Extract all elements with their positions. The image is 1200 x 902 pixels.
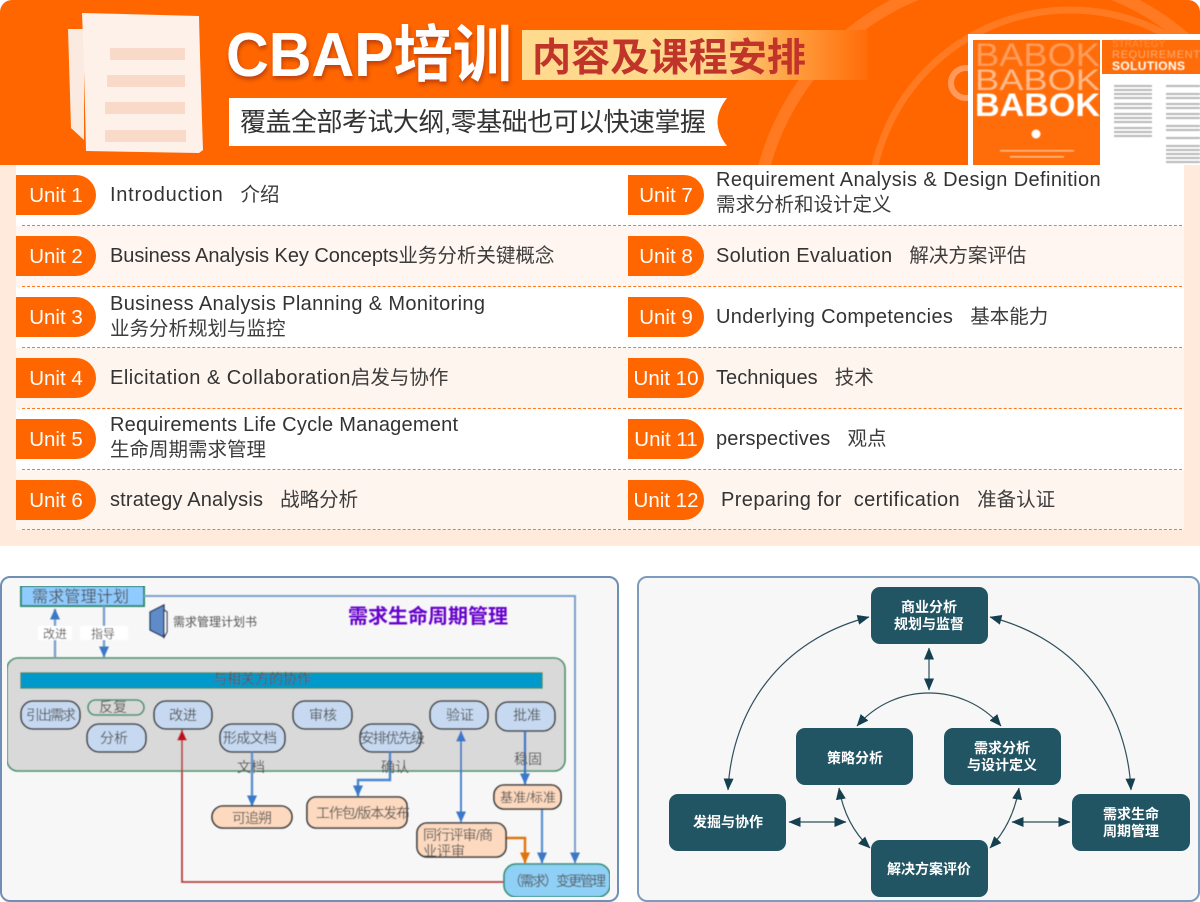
arrow: confirm [358,752,390,796]
unit 3: Unit 3 [29,306,83,329]
unit 7: Unit 7 [639,184,693,207]
arrow: improve up [54,609,56,658]
boxes: 商业分析 [901,599,957,615]
icon: paper document [68,13,203,153]
output nodes: 业评审 [423,843,465,859]
unit 10 text: Techniques 技术 [716,367,874,389]
unit 2: Unit 2 [29,245,83,268]
label: document: 文档 [237,759,265,775]
unit 5 [16,419,96,459]
label: confirm: 确认 [381,759,409,775]
nodes: 引出需求 [26,707,76,723]
unit 3 [16,297,96,337]
image: BABOK book: BABOK [975,64,1100,97]
unit 5: Unit 5 [29,428,83,451]
nodes: 分析 [100,730,128,746]
subtitle strip: 覆盖全部考试大纲,零基础也可以快速掌握 [240,107,706,137]
panel: course list background [0,165,1200,546]
collaboration container [7,658,565,771]
unit 11: Unit 11 [634,428,698,451]
nodes: 审核 [309,707,337,723]
unit 4 text: Elicitation & Collaboration启发与协作 [110,367,448,389]
banner: subtitle highlight: 内容及课程安排 [532,37,806,80]
output nodes: 基准/标准 [500,790,556,805]
unit 1: Unit 1 [29,184,83,207]
output nodes: 同行评审/商 [423,827,493,843]
unit 9 text: Underlying Competencies 基本能力 [716,306,1048,328]
label: stabilize: 稳固 [514,751,542,767]
unit 7 text: 需求分析和设计定义 [716,194,892,216]
unit 9 [628,297,704,337]
label: guide: 指导 [91,626,115,641]
unit 1 [16,175,96,215]
arrow: plan to change management [144,596,575,863]
image: BABOK book: BABOK [975,87,1100,123]
arrow: baseline [541,809,543,863]
arrow: document [251,752,253,806]
unit 4: Unit 4 [29,367,83,390]
output nodes [212,785,610,897]
label: guide [80,626,128,641]
unit 5 text: Requirements Life Cycle Management [110,414,458,436]
arrow: change loop [182,730,504,882]
image: BABOK book: REQUIREMENT [1112,49,1200,61]
unit 6 [16,480,96,520]
cycle arrows [728,617,1131,848]
unit 7 text [716,169,1101,216]
boxes: 需求生命 [1103,806,1159,822]
unit 3 text: 业务分析规划与监控 [110,318,286,340]
boxes [669,587,1190,897]
nodes: 改进 [169,707,197,723]
nodes: 反复 [99,699,127,715]
plan box: 需求管理计划 [32,588,129,606]
unit 4 [16,358,96,398]
boxes: 周期管理 [1103,823,1159,839]
label: improve [38,626,72,641]
image: BABOK book: STRATEGY [1112,39,1165,50]
unit 3 text: Business Analysis Planning & Monitoring [110,293,485,315]
unit 10 [628,358,704,398]
panel: requirements life cycle flow [0,576,619,902]
boxes: 策略分析 [827,750,883,766]
boxes: 解决方案评价 [887,861,971,877]
unit 7 text: Requirement Analysis & Design Definition [716,169,1101,191]
nodes: 形成文档 [223,730,277,746]
label: improve: 改进 [43,627,67,641]
output nodes: 可追朔 [232,810,272,826]
image: BABOK book: SOLUTIONS [1112,59,1185,73]
unit 7 [628,175,704,215]
unit 10: Unit 10 [634,367,698,390]
nodes: 验证 [446,707,474,723]
unit 9: Unit 9 [639,306,693,329]
unit 6: Unit 6 [29,489,83,512]
collaboration container: 与相关方的协作 [213,671,311,687]
arrow: guide down [103,606,105,657]
unit 1 text: Introduction 介绍 [110,184,280,206]
image: BABOK book: BABOK [975,37,1100,73]
arrow: review [506,838,525,863]
boxes: 规划与监督 [894,616,964,632]
label: plan document: 需求管理计划书 [173,614,257,629]
image: BABOK book [968,34,1200,165]
unit 12 [628,480,704,520]
unit 2 [16,236,96,276]
arrow: approve [524,731,526,784]
arrow: verify double [460,731,462,822]
title: CBAP培训 [226,21,512,90]
subtitle strip [229,98,727,146]
icon: book [150,605,167,637]
unit 2 text: Business Analysis Key Concepts业务分析关键概念 [110,245,554,267]
nodes [21,699,555,752]
boxes: 与设计定义 [967,757,1037,773]
nodes: 批准 [513,707,541,723]
unit 5 text [110,414,458,461]
banner: subtitle highlight [522,30,868,80]
panel: knowledge areas cycle [637,576,1200,902]
output nodes: （需求）变更管理 [508,873,606,889]
boxes: 需求分析 [974,740,1030,756]
unit 8 [628,236,704,276]
plan box [21,586,144,606]
unit 11 text: perspectives 观点 [716,428,886,450]
unit 8: Unit 8 [639,245,693,268]
unit 5 text: 生命周期需求管理 [110,439,266,461]
nodes: 安排优先级 [360,730,425,746]
unit 3 text [110,293,485,340]
unit 12: Unit 12 [634,489,698,512]
boxes: 发掘与协作 [693,814,763,830]
unit 8 text: Solution Evaluation 解决方案评估 [716,245,1026,267]
output nodes: 工作包/版本发布 [316,805,410,821]
unit 6 text: strategy Analysis 战略分析 [110,489,358,511]
title: life cycle: 需求生命周期管理 [348,604,508,628]
header banner [0,0,1200,165]
unit 12 text: Preparing for certification 准备认证 [721,489,1055,511]
unit 11 [628,419,704,459]
